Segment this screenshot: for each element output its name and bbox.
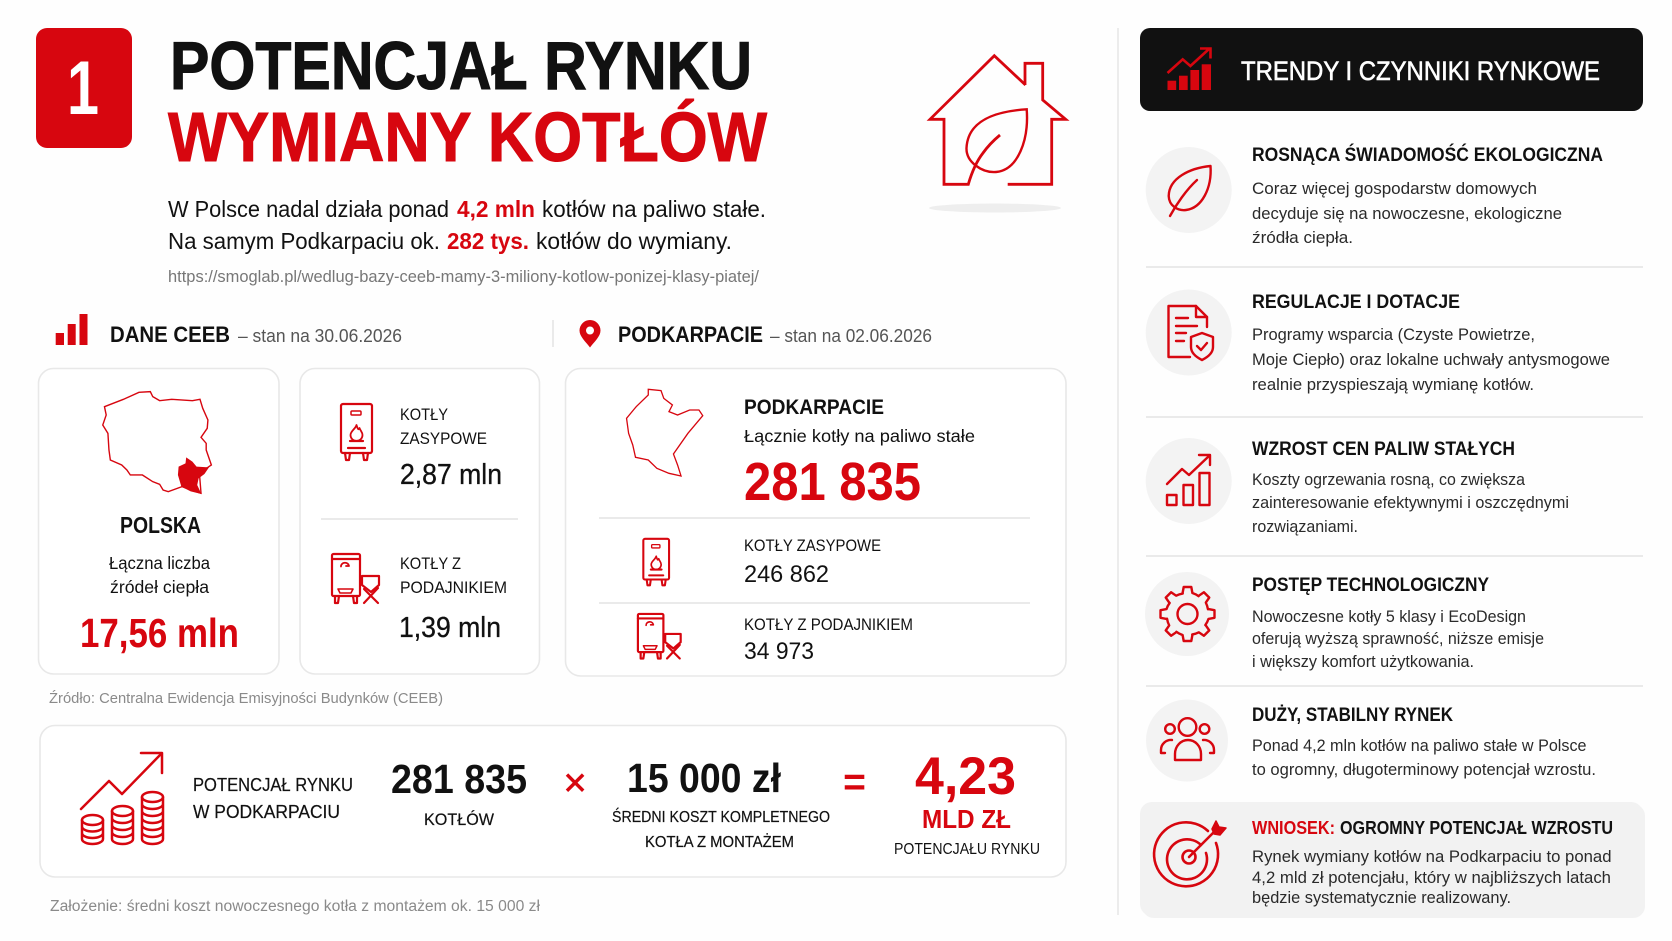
panel: typy kotłów Polska: 1,39 mln (399, 612, 501, 644)
icon: rising bars (1168, 48, 1211, 90)
intro text (168, 196, 766, 254)
icon: document with shield (1168, 306, 1213, 360)
trend: duży, stabilny rynek: DUŻY, STABILNY RYNEK (1252, 703, 1453, 726)
trend: duży, stabilny rynek (1146, 700, 1596, 782)
panel: Podkarpacie: 34 973 (744, 638, 814, 665)
heading: Podkarpacie (580, 320, 932, 348)
badge: section number 1 (36, 28, 132, 148)
intro text: kotłów na paliwo stałe. (542, 196, 766, 222)
panel: typy kotłów Polska: KOTŁY Z (400, 554, 461, 573)
heading: Podkarpacie: – stan na 02.06.2026 (770, 326, 932, 346)
panel: Polska: Łączna liczba (109, 553, 210, 573)
source url: https://smoglab.pl/wedlug-bazy-ceeb-mamy-3-miliony-kotlow-ponizej-klasy-piatej/ (168, 268, 759, 286)
panel: Polska: POLSKA (120, 512, 201, 538)
intro text: kotłów do wymiany. (536, 228, 732, 254)
trend: regulacje i dotacje: Moje Ciepło) oraz lokalne uchwały antysmogowe (1252, 350, 1610, 369)
map: Poland (103, 392, 211, 494)
panel: Podkarpacie: 281 835 (744, 452, 921, 512)
callout: wniosek: 4,2 mld zł potencjału, który w najbliższych latach (1252, 869, 1611, 887)
panel: Podkarpacie: PODKARPACIE (744, 396, 884, 419)
icon: bars (56, 314, 88, 345)
callout: wniosek: będzie systematycznie realizowany. (1252, 889, 1511, 907)
panel: kalkulacja potencjału: 4,23 (915, 747, 1016, 806)
callout: wniosek: OGROMNY POTENCJAŁ WZROSTU (1340, 817, 1613, 838)
trend: duży, stabilny rynek: to ogromny, długoterminowy potencjał wzrostu. (1252, 761, 1596, 779)
intro text: Na samym Podkarpaciu ok. (168, 228, 440, 254)
panel: Podkarpacie: KOTŁY ZASYPOWE (744, 536, 881, 555)
trend: wzrost cen paliw stałych (1146, 438, 1569, 536)
trend: postęp technologiczny: POSTĘP TECHNOLOGICZNY (1252, 574, 1489, 596)
callout: wniosek: WNIOSEK: (1252, 817, 1335, 838)
panel: Podkarpacie: 246 862 (744, 561, 829, 588)
intro text: 4,2 mln (457, 196, 535, 222)
trend: postęp technologiczny: i większy komfort użytkowania. (1252, 653, 1474, 671)
intro text: 282 tys. (447, 228, 529, 254)
panel: kalkulacja potencjału: × (563, 761, 587, 805)
intro text: W Polsce nadal działa ponad (168, 196, 449, 222)
panel: Podkarpacie: Łącznie kotły na paliwo stałe (744, 426, 975, 446)
icon: boiler small (643, 539, 669, 585)
icon: feeder boiler small (638, 614, 681, 658)
panel: kalkulacja potencjału: POTENCJAŁ RYNKU (193, 774, 353, 795)
trend: duży, stabilny rynek: Ponad 4,2 mln kotłów na paliwo stałe w Polsce (1252, 737, 1586, 755)
panel: typy kotłów Polska: 2,87 mln (400, 459, 502, 491)
trend: rosnąca świadomość ekologiczna: źródła ciepła. (1252, 228, 1353, 247)
map: Podkarpacie (627, 389, 703, 476)
trend: rosnąca świadomość ekologiczna: Coraz więcej gospodarstw domowych (1252, 179, 1537, 198)
icon: boiler (341, 404, 372, 460)
trend: regulacje i dotacje (1146, 290, 1610, 394)
trend: regulacje i dotacje: realnie przyspieszają wymianę kotłów. (1252, 375, 1534, 394)
trend: rosnąca świadomość ekologiczna (1146, 142, 1603, 247)
icon: target with arrow (1154, 821, 1226, 886)
title: WYMIANY KOTŁÓW (168, 98, 767, 176)
panel: Polska (38, 368, 279, 674)
panel: kalkulacja potencjału (40, 726, 1066, 877)
panel: Podkarpacie: KOTŁY Z PODAJNIKIEM (744, 615, 913, 634)
trend: wzrost cen paliw stałych: WZROST CEN PALIW STAŁYCH (1252, 438, 1515, 460)
panel: Polska: źródeł ciepła (110, 577, 209, 597)
callout: wniosek: Rynek wymiany kotłów na Podkarpaciu to ponad (1252, 848, 1612, 866)
callout: wniosek (1140, 802, 1645, 918)
heading: dane CEEB (56, 314, 402, 347)
heading: dane CEEB: DANE CEEB (110, 322, 230, 347)
icon: leaf (1169, 166, 1211, 216)
source note: Źródło: Centralna Ewidencja Emisyjności Budynków (CEEB) (49, 690, 443, 707)
icon: gear (1160, 587, 1214, 641)
icon: house with leaf (929, 56, 1066, 213)
icon: growth and coins (81, 753, 163, 844)
trend: postęp technologiczny (1145, 572, 1544, 671)
assumption note: Założenie: średni koszt nowoczesnego kotła z montażem ok. 15 000 zł (50, 898, 541, 915)
badge: section number 1: 1 (67, 46, 99, 131)
trend: regulacje i dotacje: REGULACJE I DOTACJE (1252, 291, 1460, 313)
panel: typy kotłów Polska (300, 368, 540, 674)
icon: feeder boiler (332, 554, 379, 603)
banner: trendy i czynniki rynkowe: TRENDY I CZYNNIKI RYNKOWE (1241, 56, 1600, 86)
panel: typy kotłów Polska: KOTŁY (400, 405, 448, 424)
panel: kalkulacja potencjału: 281 835 (391, 756, 527, 802)
trend: rosnąca świadomość ekologiczna: decyduje się na nowoczesne, ekologiczne (1252, 204, 1562, 223)
panel: Podkarpacie (566, 368, 1066, 676)
heading: Podkarpacie: PODKARPACIE (618, 322, 763, 347)
panel: kalkulacja potencjału: W PODKARPACIU (193, 801, 340, 822)
panel: kalkulacja potencjału: = (843, 761, 866, 804)
title: POTENCJAŁ RYNKU (170, 28, 752, 104)
banner: trendy i czynniki rynkowe (1140, 28, 1643, 111)
panel: kalkulacja potencjału: ŚREDNI KOSZT KOMPLETNEGO (612, 807, 830, 826)
trend: regulacje i dotacje: Programy wsparcia (Czyste Powietrze, (1252, 325, 1535, 344)
icon: chart (1167, 455, 1210, 505)
title (168, 28, 767, 176)
heading: dane CEEB: – stan na 30.06.2026 (238, 326, 402, 346)
trend: wzrost cen paliw stałych: rozwiązaniami. (1252, 518, 1358, 536)
panel: typy kotłów Polska: ZASYPOWE (400, 429, 487, 448)
trend: rosnąca świadomość ekologiczna: ROSNĄCA ŚWIADOMOŚĆ EKOLOGICZNA (1252, 142, 1603, 166)
panel: kalkulacja potencjału: KOTŁÓW (424, 810, 494, 829)
panel: typy kotłów Polska: PODAJNIKIEM (400, 578, 507, 597)
panel: kalkulacja potencjału: KOTŁA Z MONTAŻEM (645, 832, 794, 851)
panel: kalkulacja potencjału: MLD ZŁ (922, 804, 1011, 834)
panel: kalkulacja potencjału: POTENCJAŁU RYNKU (894, 841, 1040, 858)
icon: map pin (580, 320, 600, 348)
trend: postęp technologiczny: Nowoczesne kotły 5 klasy i EcoDesign (1252, 608, 1526, 626)
panel: Polska: 17,56 mln (80, 610, 239, 656)
trend: postęp technologiczny: oferują wyższą sprawność, niższe emisje (1252, 630, 1544, 648)
trend: wzrost cen paliw stałych: zainteresowanie efektywnymi i oszczędnymi (1252, 494, 1569, 512)
panel: kalkulacja potencjału: 15 000 zł (627, 755, 782, 801)
icon: people (1161, 718, 1214, 760)
trend: wzrost cen paliw stałych: Koszty ogrzewania rosną, co zwiększa (1252, 471, 1526, 489)
